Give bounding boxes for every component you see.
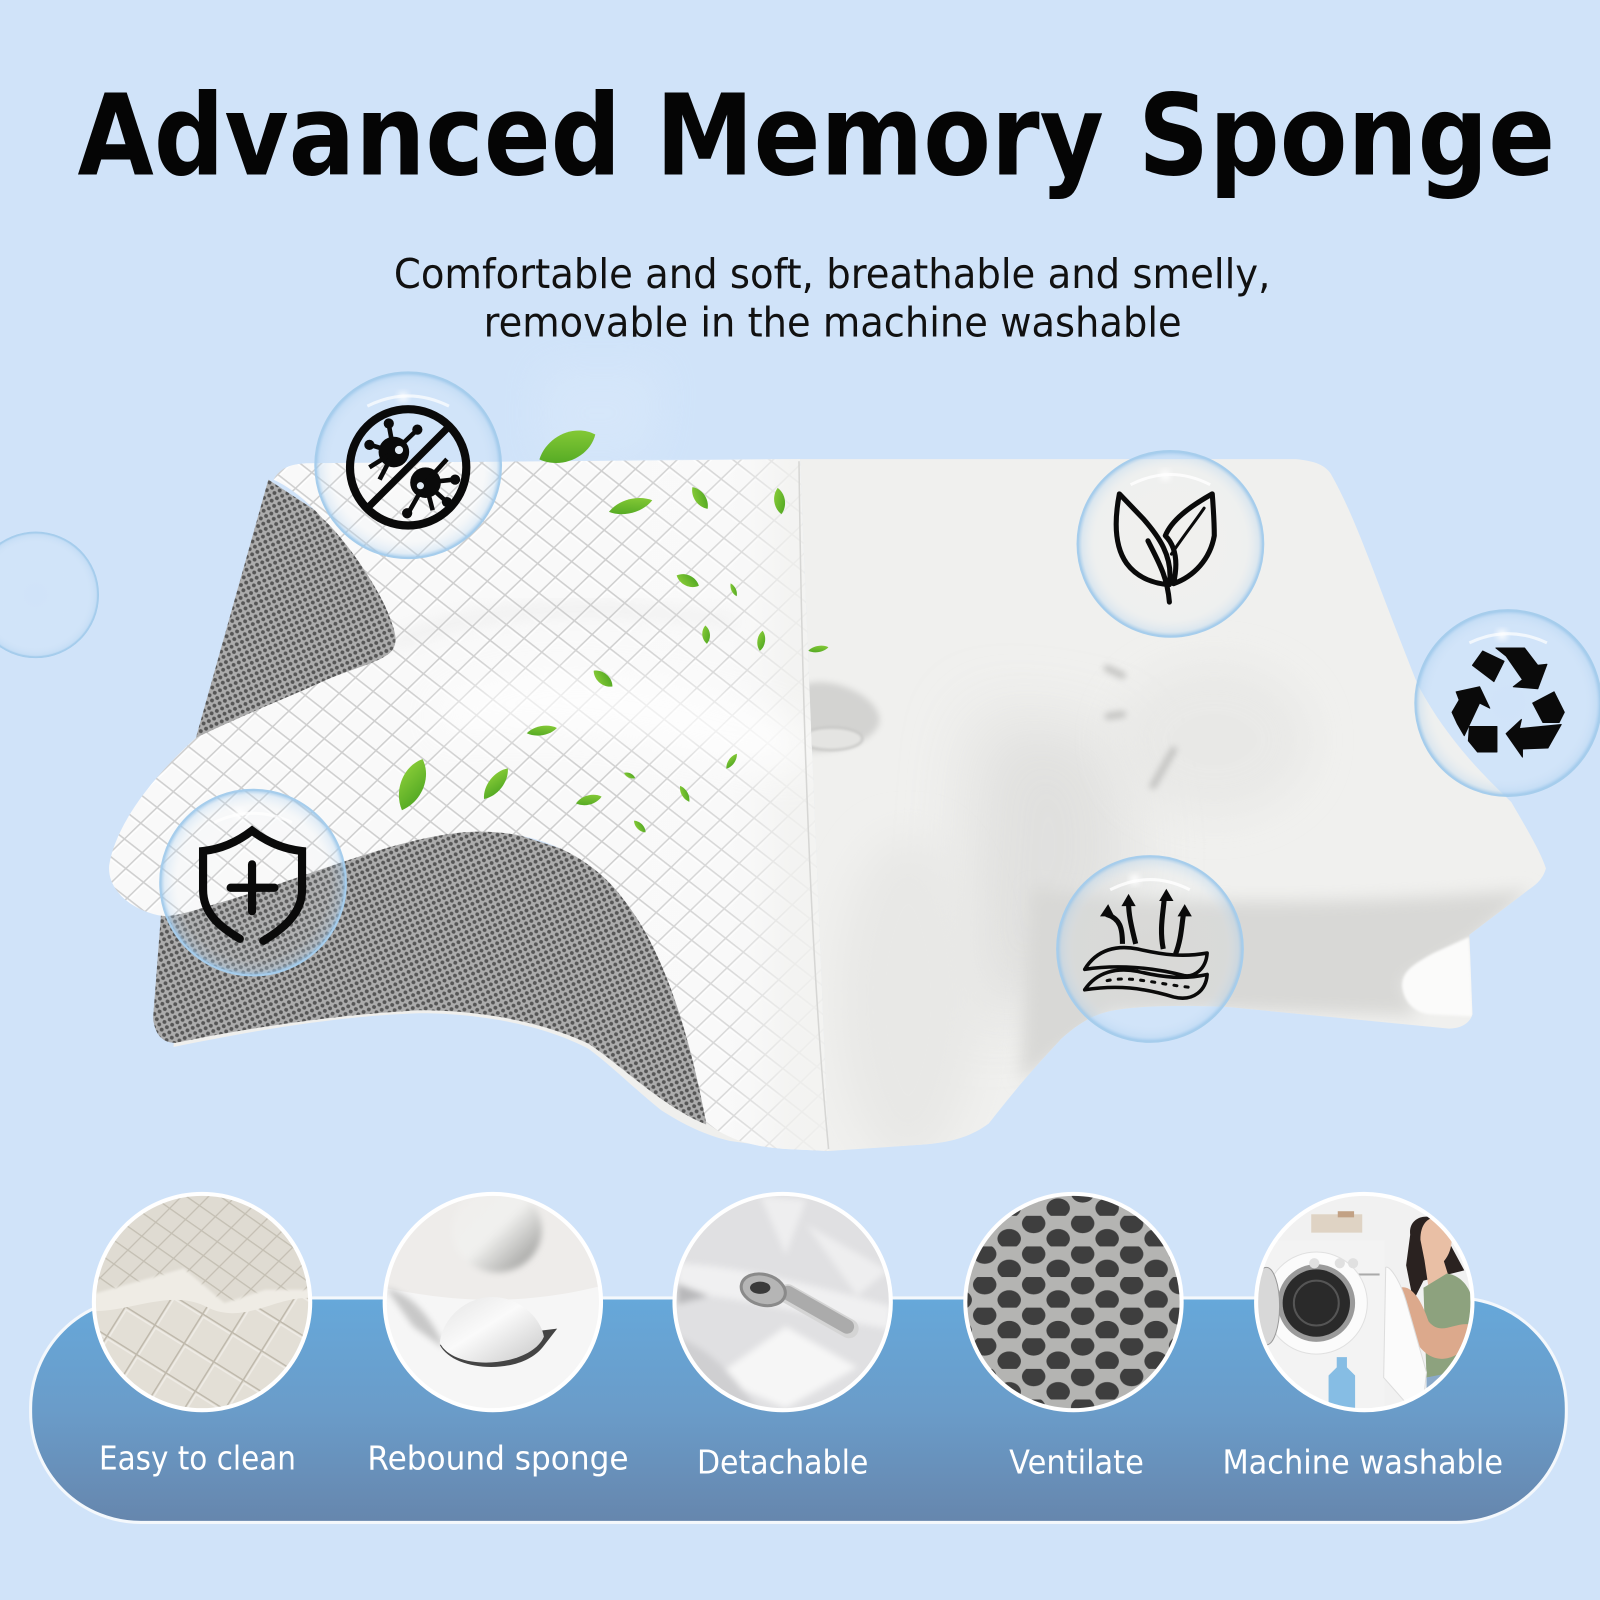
bubble: recyclable bbox=[1415, 610, 1600, 796]
feature: ventilate bbox=[959, 1189, 1189, 1481]
white rim below mesh bbox=[173, 980, 796, 1149]
lower grey mesh side bbox=[153, 806, 714, 1124]
seam line bbox=[799, 461, 829, 1149]
subtitle: removable in the machine washable bbox=[484, 299, 1182, 347]
icon: layers with rising air bbox=[1085, 889, 1207, 998]
right notch highlight bbox=[1402, 937, 1472, 1016]
falling green leaves bbox=[391, 422, 829, 834]
subtitle bbox=[394, 250, 1270, 347]
photo: foam ball bbox=[383, 1187, 602, 1413]
feature: machine washable bbox=[1222, 1189, 1503, 1481]
pillow illustration bbox=[109, 367, 1546, 1163]
quilted white cover bbox=[109, 459, 829, 1151]
upper grey mesh side bbox=[196, 480, 408, 738]
icon: recycle arrows bbox=[1452, 648, 1564, 757]
feature: detachable bbox=[673, 1194, 893, 1481]
label: Machine washable bbox=[1222, 1443, 1503, 1481]
empty bubble left bbox=[0, 532, 99, 658]
bubble: protection bbox=[160, 790, 346, 976]
bubble: anti-virus bbox=[315, 372, 501, 558]
cover highlight fading toward seam bbox=[612, 459, 829, 1151]
photo: honeycomb mesh bbox=[967, 1196, 1180, 1408]
feature: rebound sponge bbox=[367, 1187, 629, 1477]
icon: shield plus bbox=[203, 831, 302, 941]
foam shading bbox=[810, 663, 1520, 1076]
photo: zipper bbox=[673, 1194, 893, 1413]
plain memory foam body bbox=[800, 459, 1546, 1151]
bubble: breathable bbox=[1057, 856, 1243, 1042]
label: Rebound sponge bbox=[367, 1439, 629, 1477]
feature panel bbox=[31, 1298, 1566, 1522]
subtitle: Comfortable and soft, breathable and smelly, bbox=[394, 250, 1270, 298]
label: Easy to clean bbox=[99, 1439, 296, 1477]
icon: leaves bbox=[1116, 494, 1214, 602]
side hole bbox=[801, 682, 880, 752]
photo: quilted fabric bbox=[92, 1194, 316, 1413]
airflow glow bbox=[439, 675, 806, 776]
label: Detachable bbox=[697, 1443, 868, 1481]
cover crease bbox=[393, 609, 735, 645]
label: Ventilate bbox=[1009, 1443, 1144, 1481]
photo: woman and washing machine bbox=[1258, 1196, 1470, 1408]
bubble: plant based bbox=[1078, 451, 1263, 637]
icon: no virus bbox=[350, 409, 466, 526]
feature: easy to clean bbox=[92, 1194, 316, 1477]
